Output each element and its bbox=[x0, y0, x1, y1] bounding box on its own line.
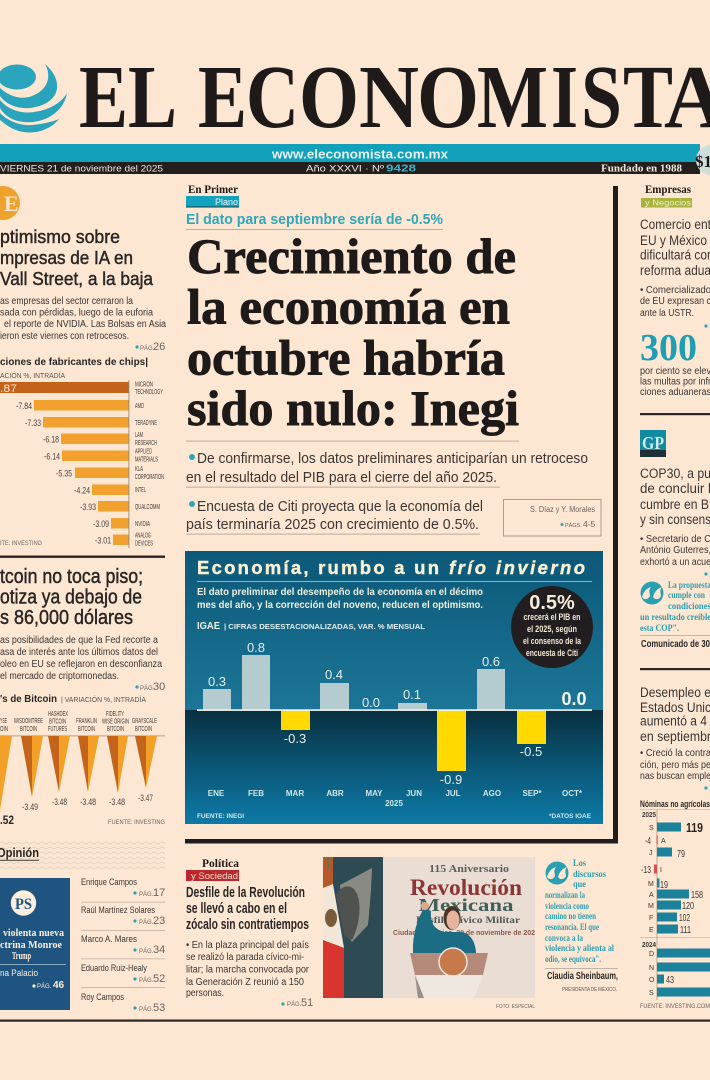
icon: GP badge bbox=[640, 430, 666, 457]
body text: • En la plaza principal del país bbox=[186, 940, 309, 951]
bar chart: nóminas: 19 bbox=[660, 880, 668, 891]
quote: Sheinbaum: que bbox=[573, 880, 586, 890]
bar chart: chip makers: -6.18 bbox=[43, 434, 59, 444]
photo credit: FOTO: ESPECIAL bbox=[496, 1004, 535, 1010]
triangle chart: bitcoin ETFs: .52 bbox=[0, 813, 14, 827]
story text: ante la USTR. bbox=[640, 308, 694, 319]
bar chart: IGAE: MAY bbox=[365, 789, 383, 798]
bar chart: nóminas: M bbox=[648, 903, 654, 910]
quote: Sheinbaum: PRESIDENTA DE MÉXICO. bbox=[562, 986, 617, 993]
main headline: sido nulo: Inegi bbox=[187, 380, 519, 436]
heading bbox=[0, 566, 143, 629]
bullet 2: país terminaría 2025 con crecimiento de 0.5%. bbox=[186, 517, 479, 533]
callout: 0.5%: el 2025, según bbox=[527, 624, 577, 634]
section tag: Política bbox=[202, 858, 239, 870]
body text bbox=[186, 940, 310, 999]
bar chart: chip makers: .87 bbox=[0, 383, 17, 395]
bar chart: IGAE: 0.0 bbox=[561, 689, 587, 709]
panel: economy chart bbox=[185, 551, 603, 824]
section tag bbox=[186, 858, 239, 881]
quote: Sheinbaum: discursos bbox=[573, 870, 606, 880]
masthead title: S bbox=[581, 48, 622, 147]
date strip: Año XXXVI · Nº bbox=[306, 164, 385, 174]
page reference: 26 bbox=[153, 341, 165, 353]
main headline: octubre habría bbox=[187, 330, 505, 386]
page reference: PÁG. bbox=[140, 685, 155, 692]
quote: Sheinbaum: Claudia Sheinbaum, bbox=[547, 971, 618, 982]
bullet 1: en el resultado del PIB para el cierre del año 2025. bbox=[186, 470, 497, 486]
bar chart: nóminas: 43 bbox=[666, 975, 674, 986]
bar chart: nóminas: M bbox=[648, 881, 654, 888]
triangle chart: bitcoin ETFs: -3.49 bbox=[22, 802, 38, 812]
triangle chart: bitcoin ETFs: OIN bbox=[0, 726, 8, 733]
featured columnist box bbox=[0, 878, 70, 1010]
story text: de concluir l bbox=[640, 481, 710, 496]
panel: empresas y negocios bbox=[640, 184, 710, 398]
bar chart: nóminas: F bbox=[649, 915, 653, 922]
bar chart: chip makers: -7.33 bbox=[25, 418, 41, 428]
body text: personas. bbox=[186, 988, 224, 999]
bar chart: chip makers: -7.84 bbox=[16, 401, 32, 411]
panel: bitcoin bbox=[0, 566, 165, 827]
body text: se realizó la parada cívico-mi- bbox=[186, 952, 304, 963]
main headline bbox=[186, 228, 519, 442]
triangle chart: bitcoin ETFs: BITCOIN bbox=[49, 718, 66, 726]
columnist list: PÁG. bbox=[139, 948, 154, 955]
photo: Sheinbaum at the parade: 115 Aniversario bbox=[429, 863, 510, 875]
quote: Sheinbaum: odio, se equivoca". bbox=[545, 955, 601, 965]
photo: Sheinbaum at the parade: Mexicana bbox=[418, 895, 514, 915]
bar chart: IGAE: 2025 bbox=[385, 799, 403, 808]
chart subtitle: mes del año, y la corrección del noveno, reducen el optimismo. bbox=[197, 600, 483, 611]
bar chart: chip makers: DEVICES bbox=[135, 540, 153, 548]
big number: 300 bbox=[640, 327, 710, 398]
bar chart: chip makers: LAM bbox=[135, 432, 143, 439]
columnist list: PÁG. bbox=[139, 891, 154, 898]
bar chart: IGAE: OCT* bbox=[562, 789, 583, 798]
section tag: y Negocios bbox=[645, 198, 691, 208]
bar chart: nóminas: -4 bbox=[645, 836, 651, 847]
columnist list: 53 bbox=[153, 1002, 165, 1014]
columnist list: Raúl Martínez Solares bbox=[81, 905, 155, 916]
chart subtitle: El dato preliminar del desempeño de la economía en el décimo bbox=[197, 587, 483, 598]
bar chart: chip makers: -5.35 bbox=[56, 468, 72, 478]
section tag: en primer plano: En Primer bbox=[188, 184, 238, 196]
page reference: 30 bbox=[153, 681, 165, 693]
columnist list: PÁG. bbox=[139, 919, 154, 926]
chart source: *DATOS IOAE bbox=[549, 813, 592, 820]
bar chart: chip makers: -3.93 bbox=[80, 502, 96, 512]
photo: Sheinbaum at the parade bbox=[323, 857, 535, 998]
chart title bbox=[0, 357, 148, 380]
columnist list: 34 bbox=[153, 944, 165, 956]
quote: esta COP". bbox=[640, 624, 679, 634]
body text: la Generación Z reunió a 150 bbox=[186, 977, 304, 988]
byline box: S. Díaz y Y. Morales bbox=[530, 505, 595, 514]
body text bbox=[0, 635, 162, 682]
bar chart: IGAE: 0.8 bbox=[247, 640, 265, 655]
byline box bbox=[504, 500, 601, 536]
triangle chart: bitcoin ETFs: BITCOIN bbox=[135, 726, 152, 733]
triangle chart: bitcoin ETFs: BITCOIN bbox=[78, 726, 95, 733]
featured columnist box: violenta nueva bbox=[3, 928, 64, 939]
panel: desempleo EU bbox=[640, 685, 710, 1010]
heading: Desfile de la Revolución bbox=[186, 884, 305, 901]
triangle chart: bitcoin ETFs: FRANKLIN bbox=[76, 718, 97, 725]
bar chart: IGAE: AGO bbox=[483, 789, 501, 798]
callout: 0.5% bbox=[511, 586, 593, 668]
bar chart: chip makers: NVIDIA bbox=[135, 521, 150, 528]
bullet 2: Encuesta de Citi proyecta que la economía del bbox=[197, 499, 483, 515]
body text: as posibilidades de que la Fed recorte a bbox=[0, 635, 158, 646]
bar chart: IGAE: 0.3 bbox=[208, 674, 226, 689]
triangle chart: bitcoin ETFs: FUTURES bbox=[48, 726, 67, 733]
columnist list: Eduardo Ruiz-Healy bbox=[81, 963, 147, 974]
bar chart: chip makers: INTEL bbox=[135, 487, 146, 494]
bar chart: IGAE: 0.4 bbox=[325, 667, 343, 682]
masthead title: N bbox=[359, 48, 419, 147]
featured columnist box: PÁG. bbox=[37, 983, 52, 990]
chart title: frío invierno bbox=[449, 557, 585, 578]
masthead title: I bbox=[551, 48, 578, 147]
columnist list: PÁG. bbox=[139, 1006, 154, 1013]
triangle chart: bitcoin ETFs: -3.48 bbox=[52, 797, 67, 807]
chart title bbox=[0, 694, 146, 705]
columnist list: PÁG. bbox=[139, 977, 154, 984]
quote: Sheinbaum: normalizan la bbox=[545, 891, 585, 901]
bar chart: chip makers: KLA bbox=[135, 466, 143, 473]
bar chart: chip makers: RESEARCH bbox=[135, 440, 157, 447]
heading: otiza ya debajo de bbox=[0, 586, 142, 608]
columnist list: Marco A. Mares bbox=[81, 934, 137, 945]
bar chart: IGAE: JUL bbox=[445, 789, 461, 798]
heading: zócalo sin contratiempos bbox=[186, 916, 309, 933]
story text bbox=[640, 217, 710, 328]
triangle chart: bitcoin ETFs: GRAYSCALE bbox=[132, 718, 157, 725]
date strip: VIERNES 21 de noviembre del 2025 bbox=[0, 164, 163, 174]
triangle chart: bitcoin ETFs: WISDOMTREE bbox=[14, 718, 43, 725]
featured columnist box: Trump bbox=[12, 951, 31, 962]
date strip bbox=[0, 144, 710, 175]
columnist list bbox=[81, 877, 165, 1014]
bar chart: IGAE: 0.0 bbox=[362, 695, 380, 710]
heading bbox=[186, 884, 309, 933]
icon: quote mark bbox=[546, 862, 568, 884]
bar chart: chip makers: -6.14 bbox=[44, 452, 60, 462]
bar chart: nóminas: I bbox=[660, 867, 662, 874]
bar chart: IGAE: ENE bbox=[208, 789, 225, 798]
body text: oleo en EU se reflejaron en desconfianza bbox=[0, 659, 162, 670]
icon: GP badge: GP bbox=[642, 433, 664, 453]
masthead title: O bbox=[299, 48, 359, 147]
bar chart: chip makers bbox=[0, 380, 164, 548]
bar chart: chip makers: MATERIALS bbox=[135, 456, 158, 464]
page reference: PÁG. bbox=[287, 1001, 302, 1008]
featured columnist box: PS bbox=[15, 896, 32, 913]
masthead title bbox=[79, 48, 710, 147]
bar chart: nóminas: 2025 bbox=[642, 812, 656, 819]
bar chart: chip makers: TECHNOLOGY bbox=[135, 389, 163, 396]
bar chart: chip makers: -3.09 bbox=[93, 519, 109, 529]
bar chart: nóminas: A bbox=[649, 892, 654, 899]
quote: Sheinbaum: resonancia. El que bbox=[545, 923, 599, 933]
bar chart: nóminas: 111 bbox=[680, 925, 691, 936]
bar chart: nóminas: J bbox=[649, 850, 652, 857]
bar chart: IGAE bbox=[197, 640, 592, 808]
panel: opinión bbox=[0, 845, 165, 1014]
bar chart: chip makers: AMD bbox=[135, 403, 144, 410]
body text bbox=[0, 296, 166, 342]
masthead title: M bbox=[477, 48, 548, 147]
bar chart: chip makers: -3.01 bbox=[95, 536, 111, 546]
chart title: 's de Bitcoin bbox=[0, 694, 57, 705]
callout: 0.5%: 0.5% bbox=[529, 592, 575, 614]
bar chart: nóminas: 120 bbox=[682, 901, 694, 912]
bar chart: IGAE: ABR bbox=[326, 789, 344, 798]
bar chart: chip makers: ANALOG bbox=[135, 532, 151, 540]
quote: Sheinbaum: violencia como bbox=[545, 902, 589, 912]
bar chart: IGAE: MAR bbox=[286, 789, 304, 798]
triangle chart: bitcoin ETFs: -3.48 bbox=[109, 797, 125, 807]
quote: Sheinbaum: Los bbox=[573, 859, 586, 869]
bar chart: nóminas: S bbox=[649, 990, 654, 997]
masthead title: EL bbox=[79, 48, 177, 147]
photo: Sheinbaum at the parade: Desfile Cívico Militar bbox=[416, 916, 521, 926]
heading: ptimismo sobre bbox=[0, 226, 120, 247]
quote: Sheinbaum: camino no tienen bbox=[545, 912, 597, 922]
featured columnist box: 46 bbox=[53, 980, 65, 991]
section tag: en primer plano bbox=[186, 184, 239, 208]
body text: sada con pérdidas, luego de la euforia bbox=[0, 308, 153, 318]
bar chart: IGAE: FEB bbox=[248, 789, 264, 798]
section tag bbox=[641, 184, 692, 208]
heading: se llevó a cabo en el bbox=[186, 900, 287, 917]
main headline: Crecimiento de bbox=[187, 228, 516, 284]
chart title bbox=[197, 557, 592, 582]
body text: el mercado de criptomonedas. bbox=[0, 671, 119, 682]
byline box: PÁGS. bbox=[565, 522, 582, 529]
bullet 1 bbox=[186, 451, 588, 488]
bar chart: nóminas: N bbox=[649, 965, 654, 972]
columnist list: Enrique Campos bbox=[81, 877, 137, 888]
section tag: y Sociedad bbox=[191, 871, 238, 881]
chart axis title: | CIFRAS DESESTACIONALIZADAS, VAR. % MENSUAL bbox=[224, 622, 425, 631]
section tag: en primer plano: Plano bbox=[215, 197, 238, 207]
quote bbox=[640, 581, 710, 650]
heading: mpresas de IA en bbox=[0, 247, 133, 268]
columnist list: 23 bbox=[153, 915, 165, 927]
triangle chart: bitcoin ETFs: -3.47 bbox=[138, 793, 153, 803]
bar chart: nóminas: 102 bbox=[679, 913, 690, 924]
story text bbox=[640, 466, 710, 576]
quote: Sheinbaum: violencia y alienta al bbox=[545, 944, 614, 954]
bar chart: chip makers: TERADYNE bbox=[135, 420, 157, 427]
quote: Sheinbaum: convoca a la bbox=[545, 934, 583, 944]
chart title: Economía, rumbo a un bbox=[197, 557, 439, 578]
chart source: FUENTE: INEGI bbox=[197, 813, 244, 820]
icon: section badge bbox=[0, 186, 20, 220]
page reference: 51 bbox=[301, 997, 313, 1009]
page reference: PÁG. bbox=[140, 345, 155, 352]
bar chart: nóminas: 158 bbox=[691, 890, 703, 901]
date strip: www.eleconomista.com.mx bbox=[271, 146, 449, 162]
bullet 2 bbox=[186, 499, 483, 534]
body text: el reporte de NVIDIA. Las Bolsas en Asia bbox=[4, 319, 166, 330]
triangle chart: bitcoin ETFs: WISE ORIGIN bbox=[102, 718, 129, 726]
section tag: Empresas bbox=[645, 184, 691, 196]
photo: Sheinbaum at the parade: Ciudad de México, 20 de noviembre de 202 bbox=[393, 930, 535, 937]
bar chart: chip makers: MICRON bbox=[135, 382, 153, 388]
panel: política y sociedad bbox=[186, 858, 313, 1009]
kicker: El dato para septiembre sería de -0.5% bbox=[186, 211, 443, 228]
story text bbox=[640, 685, 710, 790]
quote: Sheinbaum bbox=[545, 859, 618, 993]
featured columnist box: na Palacio bbox=[0, 968, 38, 978]
bar chart: nóminas: 79 bbox=[677, 849, 685, 860]
masthead logo: globe bbox=[0, 64, 67, 132]
byline box: 4-5 bbox=[583, 519, 596, 529]
masthead title: E bbox=[198, 48, 247, 147]
date strip: 9428 bbox=[386, 164, 417, 174]
heading bbox=[0, 226, 154, 289]
bar chart: nóminas: -13 bbox=[641, 865, 651, 876]
callout: 0.5%: el consenso de la bbox=[523, 636, 582, 646]
source: FUENTE: INVESTING bbox=[108, 820, 165, 826]
bar chart: IGAE: 0.6 bbox=[482, 654, 500, 669]
icon: section badge: E bbox=[4, 191, 19, 216]
bar chart: nóminas bbox=[640, 799, 710, 1000]
callout: 0.5%: encuesta de Citi bbox=[526, 648, 578, 658]
triangle chart: bitcoin ETFs: FIDELITY bbox=[106, 711, 124, 718]
page reference bbox=[281, 997, 313, 1009]
source: ITE: INVESTING bbox=[0, 541, 42, 547]
big number: 300: 300 bbox=[640, 327, 697, 369]
columnist list: 17 bbox=[153, 887, 165, 899]
body text: asa de interés ante los últimos datos del bbox=[0, 647, 158, 658]
featured columnist box: ctrina Monroe bbox=[0, 940, 63, 951]
triangle chart: bitcoin ETFs: YSE bbox=[0, 718, 7, 725]
bar chart: IGAE: 0.1 bbox=[403, 687, 421, 702]
triangle chart: bitcoin ETFs: BITCOIN bbox=[20, 726, 37, 733]
chart axis title: IGAE bbox=[197, 621, 220, 632]
bar chart: nóminas: E bbox=[649, 927, 654, 934]
bar chart: nóminas: D bbox=[649, 951, 654, 958]
body text: ieron este viernes con retrocesos. bbox=[0, 331, 129, 342]
chart source bbox=[197, 813, 592, 820]
bar chart: IGAE: -0.5 bbox=[520, 744, 542, 759]
bar chart: IGAE: JUN bbox=[406, 789, 422, 798]
bar chart: chip makers: QUALCOMM bbox=[135, 504, 160, 511]
chart title: ACIÓN %, INTRADÍA bbox=[0, 371, 65, 380]
columnist list: Roy Campos bbox=[81, 992, 124, 1003]
heading: Vall Street, a la baja bbox=[0, 268, 154, 289]
triangle chart: bitcoin ETFs: HASHDEX bbox=[48, 711, 68, 718]
bullet 1: De confirmarse, los datos preliminares anticiparían un retroceso bbox=[197, 451, 588, 467]
columnist list: 52 bbox=[153, 973, 165, 985]
masthead title: C bbox=[246, 48, 299, 147]
triangle chart: bitcoin ETFs: BITCOIN bbox=[107, 726, 124, 733]
date strip: Fundado en 1988 bbox=[601, 164, 682, 174]
page reference bbox=[135, 681, 165, 693]
chart axis title bbox=[197, 621, 425, 632]
photo: Sheinbaum at the parade: Revolución bbox=[410, 875, 522, 900]
body text: as empresas del sector cerraron la bbox=[0, 296, 133, 307]
chart subtitle bbox=[197, 587, 483, 611]
bar chart: nóminas: O bbox=[649, 977, 655, 984]
masthead title: O bbox=[417, 48, 479, 147]
callout: 0.5%: crecerá el PIB en bbox=[524, 612, 580, 622]
heading: s 86,000 dólares bbox=[0, 607, 133, 629]
chart title: ciones de fabricantes de chips| bbox=[0, 357, 148, 368]
bar chart: nóminas: 2024 bbox=[642, 942, 656, 949]
panel: COP30 bbox=[640, 430, 710, 650]
page reference bbox=[135, 341, 165, 353]
chart title: | VARIACIÓN %, INTRADÍA bbox=[61, 695, 146, 704]
bar chart: IGAE: -0.3 bbox=[284, 731, 306, 746]
panel: optimismo IA bbox=[0, 186, 166, 548]
triangle chart: bitcoin ETFs bbox=[0, 711, 165, 827]
bar chart: chip makers: APPLIED bbox=[135, 448, 152, 456]
bar chart: nóminas: A bbox=[661, 838, 666, 845]
triangle chart: bitcoin ETFs: -3.48 bbox=[80, 797, 96, 807]
masthead title: T bbox=[623, 48, 673, 147]
bar chart: chip makers: -4.24 bbox=[74, 486, 90, 496]
bar chart: IGAE: SEP* bbox=[522, 789, 542, 798]
bar chart: chip makers: CORPORATION bbox=[135, 474, 164, 481]
bar chart: IGAE: -0.9 bbox=[440, 772, 462, 787]
bar chart: nóminas: S bbox=[649, 825, 654, 832]
main headline: la economía en bbox=[187, 278, 510, 334]
bar chart: nóminas: 119 bbox=[686, 820, 703, 835]
body text: litar; la marcha convocada por bbox=[186, 964, 310, 976]
heading: tcoin no toca piso; bbox=[0, 566, 143, 588]
